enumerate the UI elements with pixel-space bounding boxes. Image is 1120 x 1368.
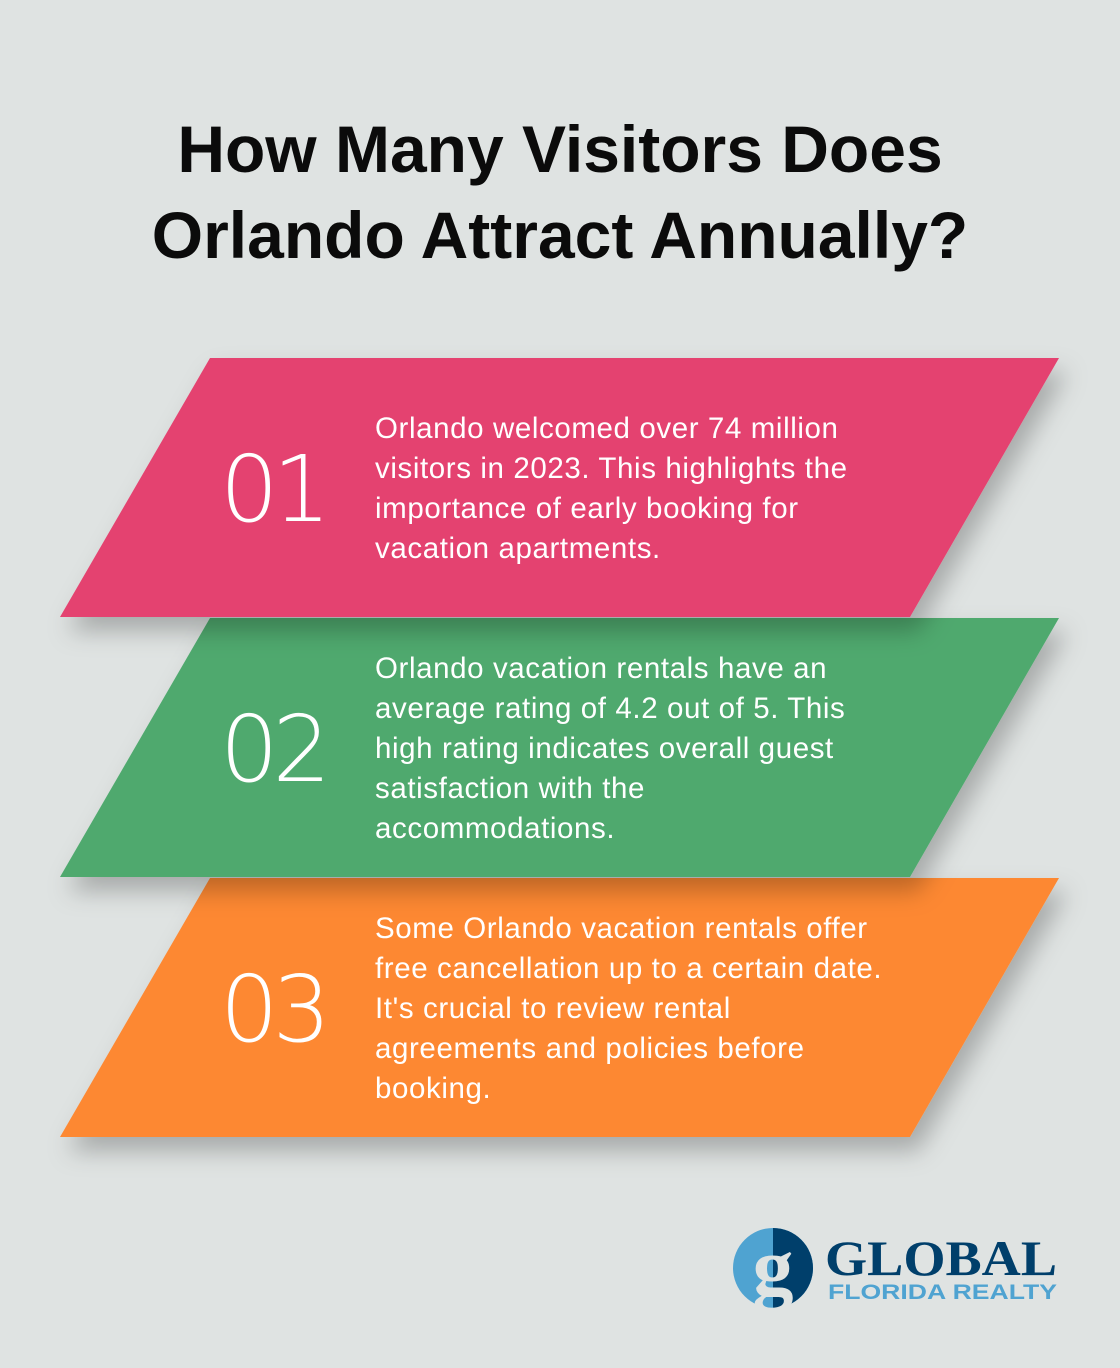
logo text bbox=[825, 1230, 1057, 1304]
number 01: 01 bbox=[220, 436, 325, 543]
text 02: average rating of 4.2 out of 5. This bbox=[375, 692, 845, 725]
text 02 bbox=[375, 652, 845, 845]
title bbox=[152, 112, 968, 272]
text 01: vacation apartments. bbox=[375, 532, 661, 565]
text 03: Some Orlando vacation rentals offer bbox=[375, 912, 868, 945]
text 01 bbox=[375, 412, 848, 565]
number 03: 03 bbox=[220, 956, 325, 1063]
logo bbox=[733, 1222, 1057, 1312]
text 02: high rating indicates overall guest bbox=[375, 732, 834, 765]
text 03: agreements and policies before bbox=[375, 1032, 805, 1065]
title: How Many Visitors Does bbox=[177, 112, 943, 186]
text 02: Orlando vacation rentals have an bbox=[375, 652, 827, 685]
text 01: importance of early booking for bbox=[375, 492, 799, 525]
number 02: 02 bbox=[220, 696, 325, 803]
panel 02 bbox=[220, 652, 845, 845]
icon: g circle: g bbox=[752, 1222, 794, 1312]
text 01: visitors in 2023. This highlights the bbox=[375, 452, 848, 485]
icon: g circle bbox=[733, 1221, 813, 1312]
text 02: satisfaction with the bbox=[375, 772, 645, 805]
logo text: FLORIDA REALTY bbox=[828, 1281, 1057, 1304]
text 03 bbox=[375, 912, 882, 1105]
title: Orlando Attract Annually? bbox=[152, 198, 968, 272]
panel 03 bbox=[220, 912, 882, 1105]
band: 01 bbox=[60, 358, 1059, 617]
logo text: GLOBAL bbox=[825, 1230, 1057, 1286]
text 03: booking. bbox=[375, 1072, 491, 1105]
text 03: It's crucial to review rental bbox=[375, 992, 731, 1025]
text 02: accommodations. bbox=[375, 812, 615, 845]
band: 03 bbox=[60, 878, 1059, 1137]
text 03: free cancellation up to a certain date. bbox=[375, 952, 882, 985]
panel 01 bbox=[220, 412, 848, 565]
band: 02 bbox=[60, 618, 1059, 877]
text 01: Orlando welcomed over 74 million bbox=[375, 412, 839, 445]
